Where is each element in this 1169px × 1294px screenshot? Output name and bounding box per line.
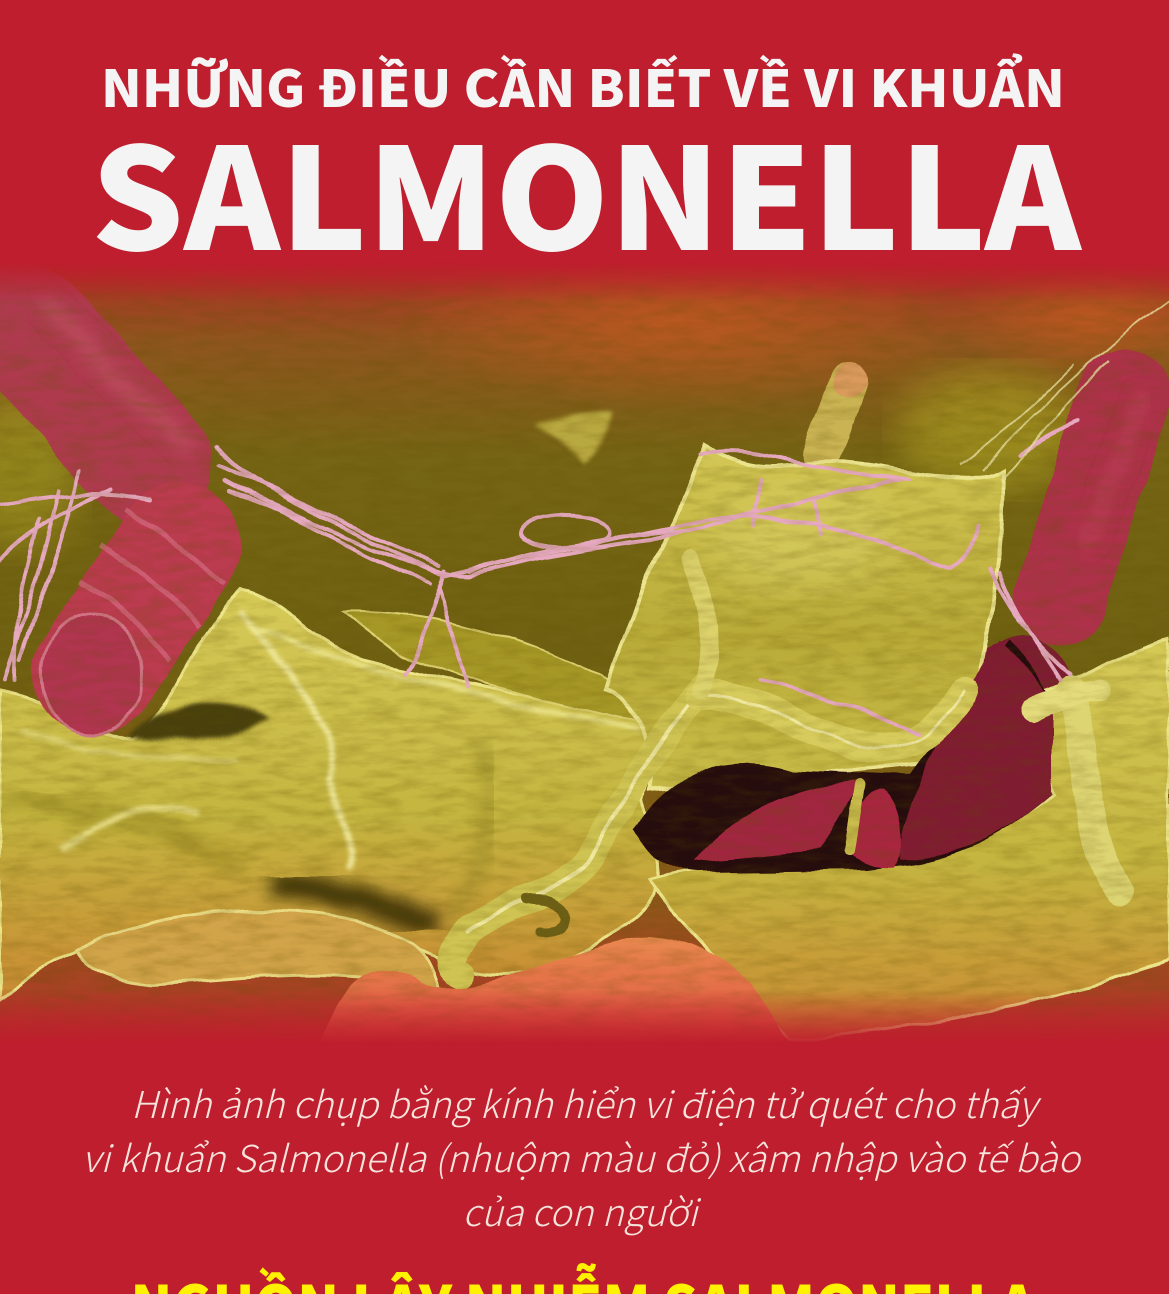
textured image contents <box>0 280 1169 1050</box>
yellow cell: left body <box>0 590 690 1000</box>
title line 1: NHỮNG ĐIỀU CẦN BIẾT VỀ VI KHUẨN <box>101 48 1065 122</box>
photo fade top <box>0 262 1169 296</box>
yellow cell: shadow fold <box>125 702 270 741</box>
yellow cell: lower right body <box>650 640 1169 1040</box>
bacterium: right rod <box>984 350 1169 689</box>
bacterium: front left rod <box>42 510 225 734</box>
photo caption: của con người <box>462 1183 702 1237</box>
yellow cell: upper fold <box>345 612 660 725</box>
photo caption: vi khuẩn Salmonella (nhuộm màu đỏ) xâm nhập vào tế bào <box>82 1129 1083 1183</box>
surface grain <box>0 262 1169 1044</box>
light fibres upper right <box>960 300 1169 480</box>
photo fade bottom <box>0 990 1169 1044</box>
pink flagella <box>0 422 1080 732</box>
salmon lobes at bottom <box>324 937 783 1035</box>
cell membrane: finger projection <box>822 363 867 455</box>
title line 2: SALMONELLA <box>91 86 1083 291</box>
dark cavity with invading bacteria <box>632 640 1052 872</box>
title <box>91 48 1083 291</box>
photo caption <box>82 1075 1083 1237</box>
yellow cell: bottom left lobe <box>75 910 440 1000</box>
cup highlight <box>710 490 890 590</box>
yellow cell: central cup <box>605 445 1003 790</box>
photo caption: Hình ảnh chụp bằng kính hiển vi điện tử quét cho thấy <box>131 1075 1042 1129</box>
yellow cell: folds and shading <box>0 610 640 925</box>
bacterium: upper left rod <box>0 280 190 465</box>
yellow cell: membrane bridge <box>451 560 1120 975</box>
photo: Salmonella bacteria invading a human cell <box>0 240 1169 1050</box>
